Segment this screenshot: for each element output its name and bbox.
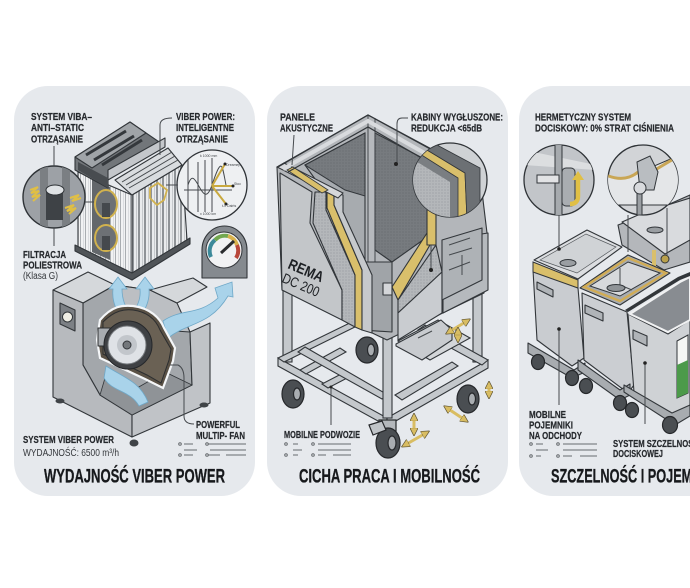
labels <box>280 112 503 441</box>
cabinet model text <box>280 256 328 300</box>
labels: FILTRACJA <box>23 250 66 261</box>
labels: OTRZĄSANIE <box>31 134 83 146</box>
title: wydajność: WYDAJNOŚĆ VIBER POWER <box>44 466 225 488</box>
castors <box>282 337 479 458</box>
leaders and legend <box>285 118 433 456</box>
legend <box>530 443 597 457</box>
bin 2 <box>578 255 670 418</box>
title: cicha praca: CICHA PRACA I MOBILNOŚĆ <box>299 466 480 488</box>
labels: POLIESTROWA <box>23 260 82 272</box>
airflow arrows <box>104 277 233 406</box>
leader and legend <box>170 365 246 456</box>
motion arrows <box>405 321 489 445</box>
labels: INTELIGENTNE <box>176 123 234 134</box>
trolley frame <box>278 280 488 426</box>
labels: REDUKCJA <65dB <box>411 124 482 134</box>
lens: clamp on rim <box>606 145 680 215</box>
acoustic cabinet <box>277 115 488 340</box>
labels: MOBILNE PODWOZIE <box>284 430 360 441</box>
labels: MOBILNE <box>529 410 566 421</box>
leaders <box>557 208 667 424</box>
lens: oscillation graph: Dreamep <box>226 163 240 167</box>
labels <box>23 112 245 459</box>
labels: NA ODCHODY <box>529 431 582 442</box>
fan assembly <box>97 306 175 388</box>
labels: VIBER POWER: <box>176 112 235 123</box>
labels: SYSTEM VIBER POWER <box>23 435 115 446</box>
labels: OTRZĄSANIE <box>176 134 228 146</box>
labels <box>529 112 690 460</box>
lens: anti-static shaker <box>23 146 94 246</box>
panel: wydajność Viber Power <box>14 86 255 496</box>
lens: latch with arrow <box>524 140 596 220</box>
bin 3 with level gauge <box>624 272 690 434</box>
cabinet model text: DC 200 <box>280 270 322 300</box>
panel: cicha praca i mobilność <box>267 86 508 496</box>
back bin <box>618 195 690 270</box>
lens: oscillation graph: Stoc <box>234 182 241 186</box>
labels: POJEMNIKI <box>529 420 573 432</box>
machine housing <box>53 272 210 446</box>
labels: PANELE <box>280 112 315 124</box>
labels: AKUSTYCZNE <box>280 124 333 134</box>
bin 1 <box>528 230 622 394</box>
panel: szczelność i pojemność <box>519 86 690 496</box>
lens: oscillation graph: t-0 Dairts <box>222 204 236 208</box>
labels: HERMETYCZNY SYSTEM <box>535 112 631 124</box>
lens: oscillation graph: x 1000 km <box>200 212 216 216</box>
labels: SYSTEM VIBA– <box>31 112 92 123</box>
lens: oscillation graph <box>160 118 247 220</box>
floor load box <box>396 320 452 360</box>
lens: oscillation graph: k 1000 mm <box>200 154 217 158</box>
labels: WYDAJNOŚĆ: 6500 m³/h <box>23 446 119 459</box>
labels: DOCISKOWEJ <box>613 449 663 460</box>
labels: KABINY WYGŁUSZONE: <box>411 112 503 124</box>
cabinet model text: REMA <box>285 256 326 286</box>
gauge <box>202 226 247 278</box>
labels: POWERFUL <box>196 420 240 431</box>
labels: ANTI–STATIC <box>31 123 84 134</box>
filter unit <box>75 122 190 280</box>
lens: acoustic layers <box>408 143 487 220</box>
labels: (Klasa G) <box>23 271 58 282</box>
labels: MULTIP- FAN <box>196 431 245 442</box>
